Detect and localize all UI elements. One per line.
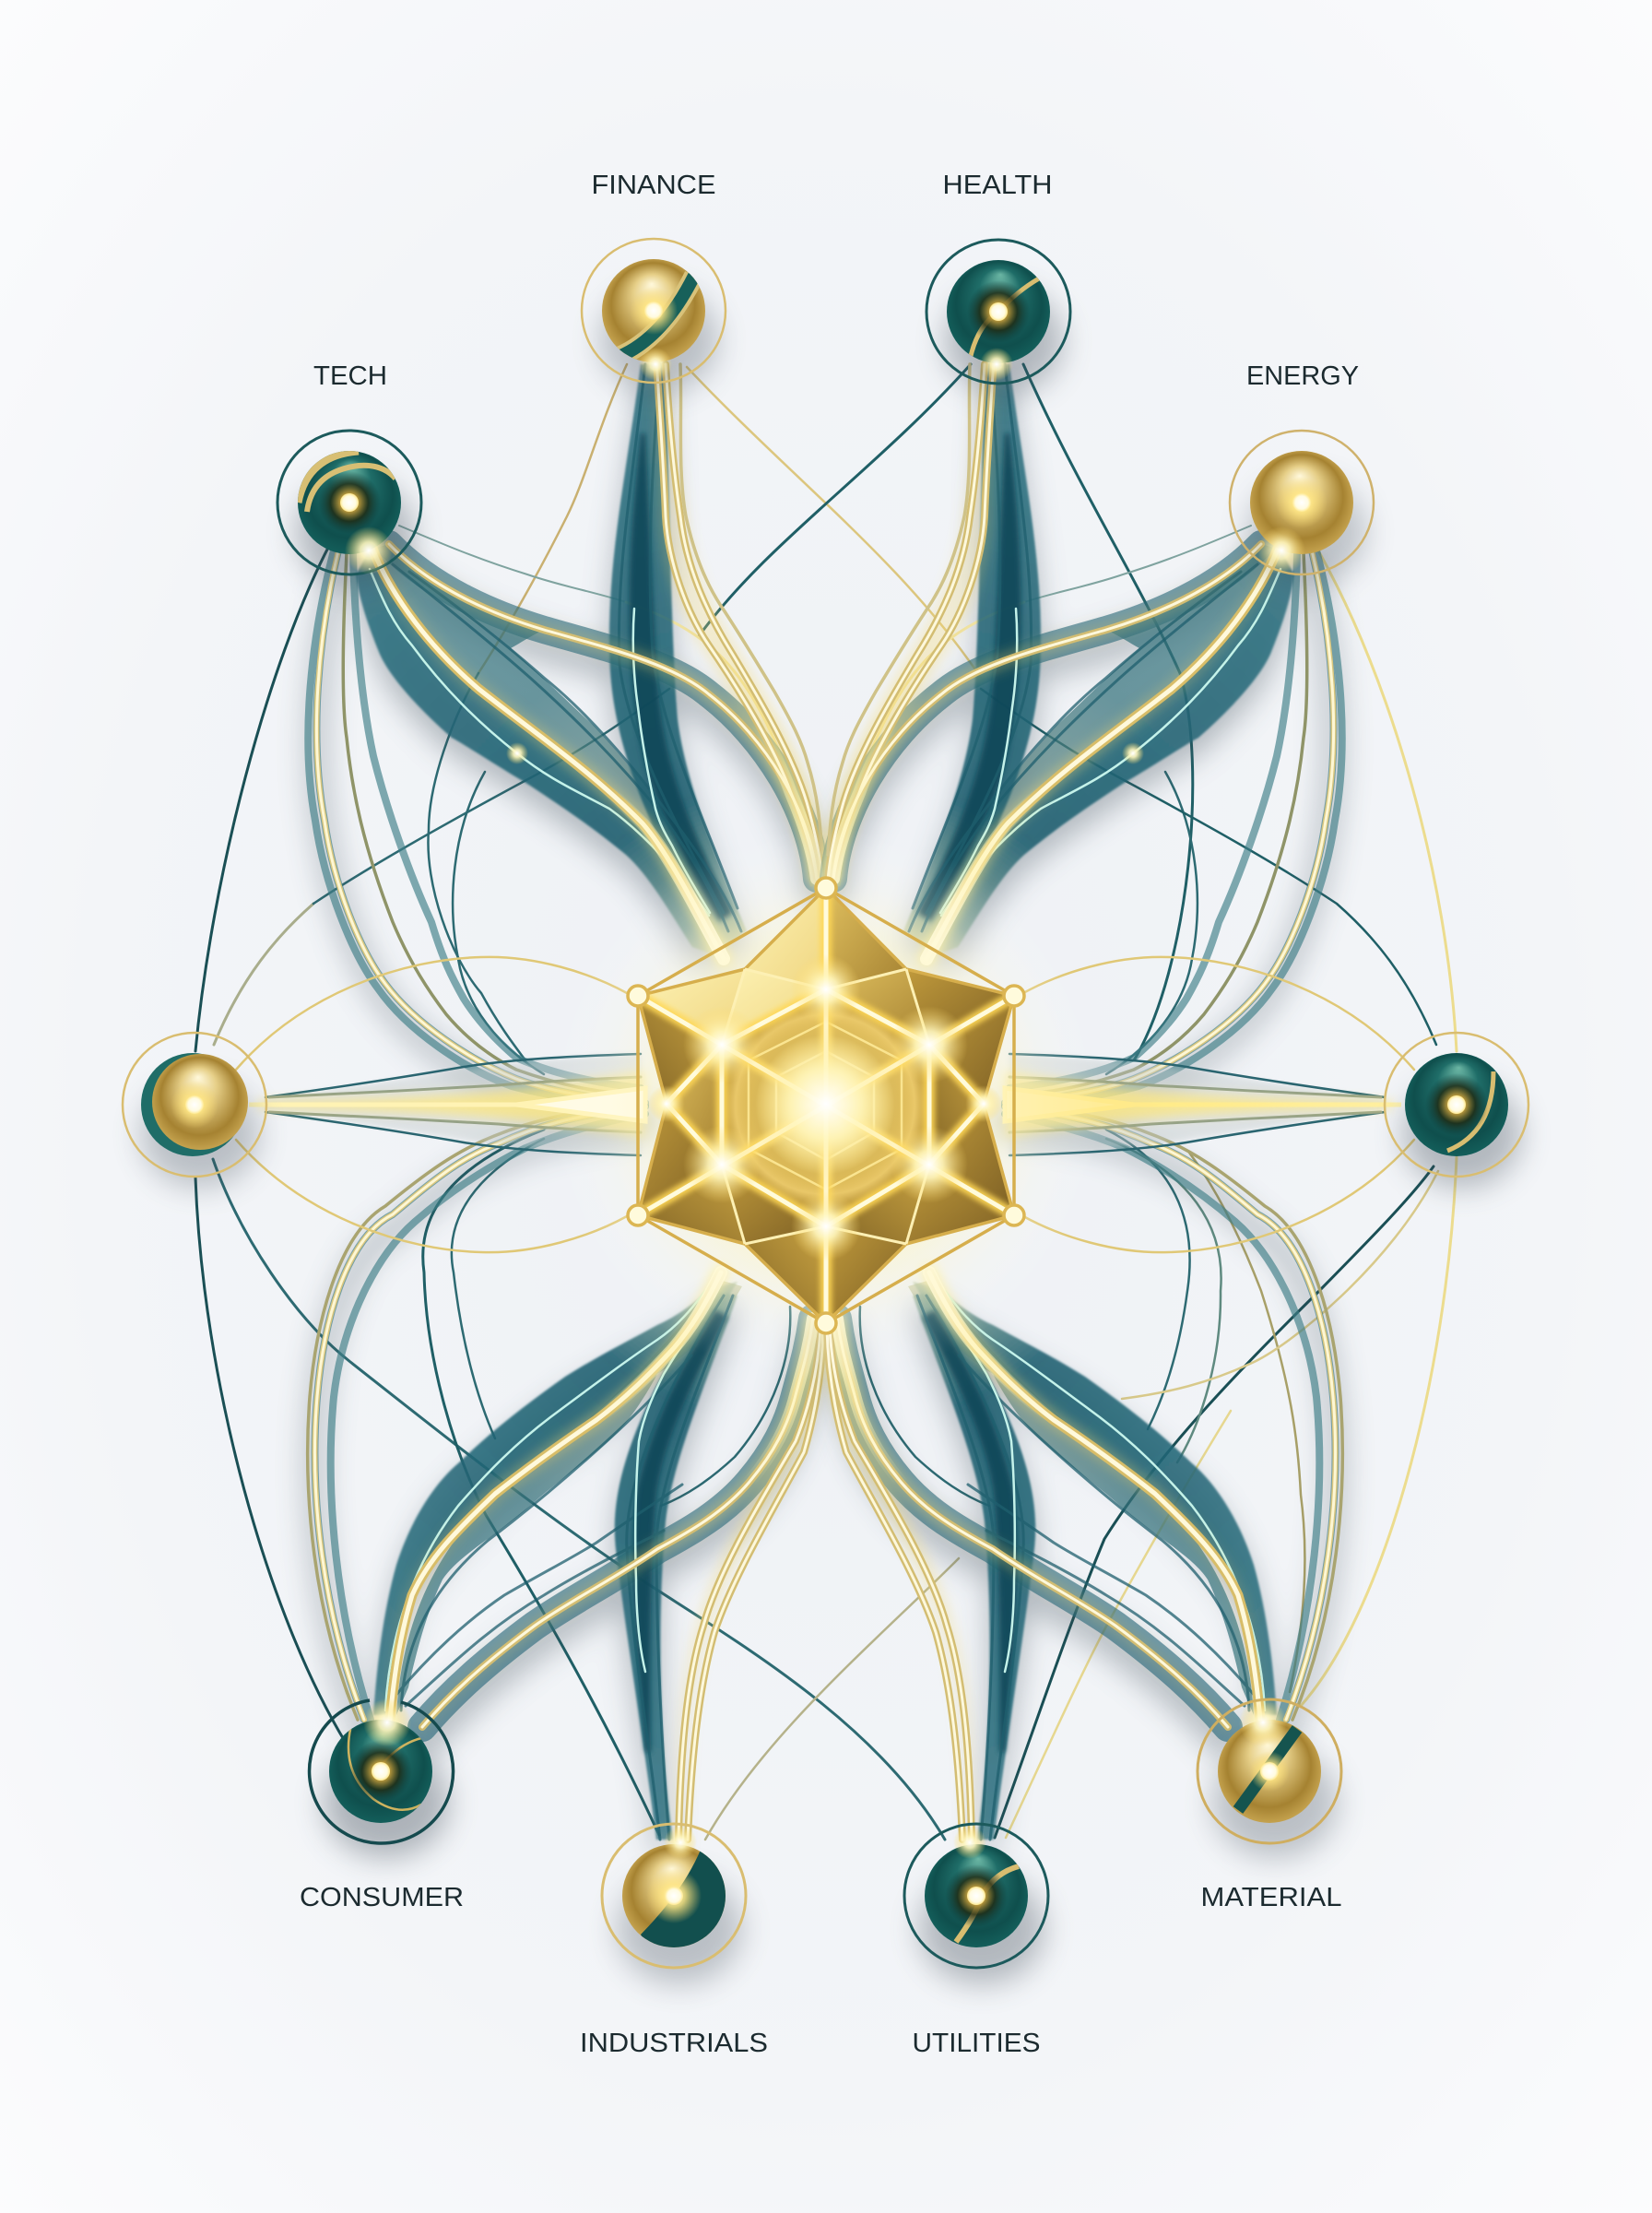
outer loop gold body — [316, 550, 645, 1103]
line: utilities to right — [995, 1166, 1434, 1838]
beam bloom — [258, 1071, 645, 1138]
tech and finance teal bands — [356, 364, 747, 956]
line: lower loop B — [452, 1139, 544, 1438]
label: tech: TECH — [313, 361, 387, 391]
line: material thin — [1189, 1153, 1304, 1692]
line: lower loop right outer — [1106, 1139, 1221, 1462]
beam bloom right — [1005, 1071, 1392, 1138]
line: lower loop right — [1106, 1130, 1190, 1429]
hub light lines glow — [638, 888, 1014, 1323]
hub vertex nodes — [628, 878, 1024, 1333]
line: energy to right node — [1318, 550, 1457, 1051]
tech pale gold thread — [626, 602, 811, 885]
gold glow — [390, 1272, 820, 1840]
node entry flares — [345, 348, 1305, 1859]
hub inner hexagon — [722, 989, 929, 1226]
hub concentric rings — [749, 1022, 902, 1189]
consumer lower band — [396, 1279, 742, 1715]
consumer and industrials teal bands — [373, 1282, 738, 1840]
outer loop light — [315, 1106, 645, 1720]
hub thin pale lines — [722, 969, 929, 1244]
line: finance cross — [687, 367, 981, 678]
outer loop teal — [315, 1106, 645, 1720]
left beam grey strand — [269, 1112, 641, 1132]
line: left node to utilities — [213, 1159, 945, 1840]
tech olive band — [369, 549, 741, 956]
node: consumer — [310, 1700, 454, 1858]
infographic canvas — [122, 175, 1538, 2053]
hub facets — [638, 888, 1014, 1323]
beam bright right — [1005, 1088, 1401, 1121]
left beam shade — [266, 1105, 641, 1155]
label: material: MATERIAL — [1200, 1883, 1342, 1912]
hub centre glow — [725, 1002, 927, 1205]
line: finance loop — [428, 673, 525, 1060]
node: energy — [1230, 431, 1374, 586]
teal strands — [395, 1296, 733, 1840]
line: health cross — [699, 364, 971, 636]
node: right sector — [1385, 1033, 1528, 1188]
label: industrials: INDUSTRIALS — [580, 2029, 768, 2058]
dark finance core — [629, 433, 733, 922]
tech pale teal thread — [399, 526, 626, 602]
near-hub cores — [390, 1272, 813, 1727]
line: hub lower arc right — [860, 1307, 989, 1506]
outer loop olive — [308, 1105, 645, 1720]
gold tubes — [371, 544, 724, 959]
outer loop teal tubes — [308, 550, 645, 1105]
tech node-side wedge — [373, 544, 544, 648]
label: health: HEALTH — [942, 171, 1053, 200]
pale cores — [422, 1319, 823, 1840]
upper gold tubes — [389, 360, 822, 881]
hub outer wire hexagon — [638, 888, 1014, 1323]
left beam lower arc — [236, 1140, 627, 1252]
left beam grey strand — [269, 1077, 641, 1097]
line: health to right — [1023, 364, 1193, 1060]
gold glow — [371, 360, 822, 959]
left beam strands — [266, 1054, 641, 1097]
beam bright left — [249, 1088, 645, 1121]
outer loop light strand — [316, 550, 645, 1103]
pale cores — [389, 360, 822, 881]
hub bright lines — [638, 897, 1014, 1314]
dark industrials core — [633, 1309, 728, 1752]
gold pale tubes — [422, 1319, 823, 1840]
node: left sector — [123, 1033, 266, 1188]
node: finance — [582, 239, 726, 394]
line: left node to consumer — [195, 1178, 346, 1743]
tech upper tube shoulder — [389, 544, 817, 879]
line: right node to material — [1301, 1157, 1457, 1706]
central gold polyhedron hub — [628, 878, 1024, 1333]
horizontal beam glow — [249, 1071, 1401, 1138]
line: inner loop left — [453, 772, 544, 1074]
label: finance: FINANCE — [592, 171, 715, 200]
near-hub cores — [371, 360, 817, 959]
finance thin gold — [680, 364, 822, 855]
ribbons: bottom-right quadrant (mirror) — [827, 1105, 1414, 1856]
line: tech to left node — [195, 544, 330, 1051]
second tube shoulder — [422, 1319, 813, 1727]
outer loop gold body — [315, 1106, 645, 1720]
cyan strands — [370, 569, 710, 916]
hub junction sparks — [648, 954, 1002, 1261]
strand sparkle — [506, 742, 528, 764]
line: rising across — [313, 689, 669, 904]
line: utilities gold — [1006, 1411, 1231, 1838]
cyan strands — [385, 1291, 714, 1710]
outer loop olive strand — [343, 553, 641, 1095]
line: right node rising — [981, 689, 1436, 1045]
line: finance down — [478, 364, 627, 673]
left beam upper arc — [236, 957, 627, 1070]
ribbon shadows — [315, 1123, 813, 1856]
line: industrials cross — [705, 1558, 959, 1840]
teal strands — [393, 364, 741, 931]
node: utilities — [904, 1824, 1048, 1984]
left beam strand — [266, 1112, 641, 1155]
label: energy: ENERGY — [1246, 361, 1359, 391]
hub glow — [549, 828, 1102, 1381]
label: consumer: CONSUMER — [300, 1883, 464, 1912]
ribbon shadows — [316, 381, 817, 1119]
node: material — [1198, 1699, 1341, 1858]
thin network lines — [195, 364, 1457, 1840]
line: hub lower arc — [661, 1307, 790, 1506]
node: industrials — [602, 1824, 746, 1984]
gold bright cores — [371, 544, 724, 959]
left beam shade — [266, 1054, 641, 1105]
line: right arc gold — [1122, 1171, 1438, 1399]
gold cores — [390, 1272, 721, 1720]
ribbons: bottom-left quadrant — [236, 1105, 823, 1856]
line: lower loop A — [423, 1130, 659, 1835]
line: inner loop right — [1106, 772, 1198, 1074]
node: tech — [277, 431, 421, 586]
node: health — [926, 240, 1070, 395]
ribbons: top-right quadrant (mirror) — [828, 360, 1414, 1119]
label: utilities: UTILITIES — [913, 2029, 1040, 2058]
line: left node rising — [214, 904, 313, 1045]
ribbons: top-left quadrant — [236, 360, 822, 1119]
gold tubes — [390, 1272, 721, 1720]
